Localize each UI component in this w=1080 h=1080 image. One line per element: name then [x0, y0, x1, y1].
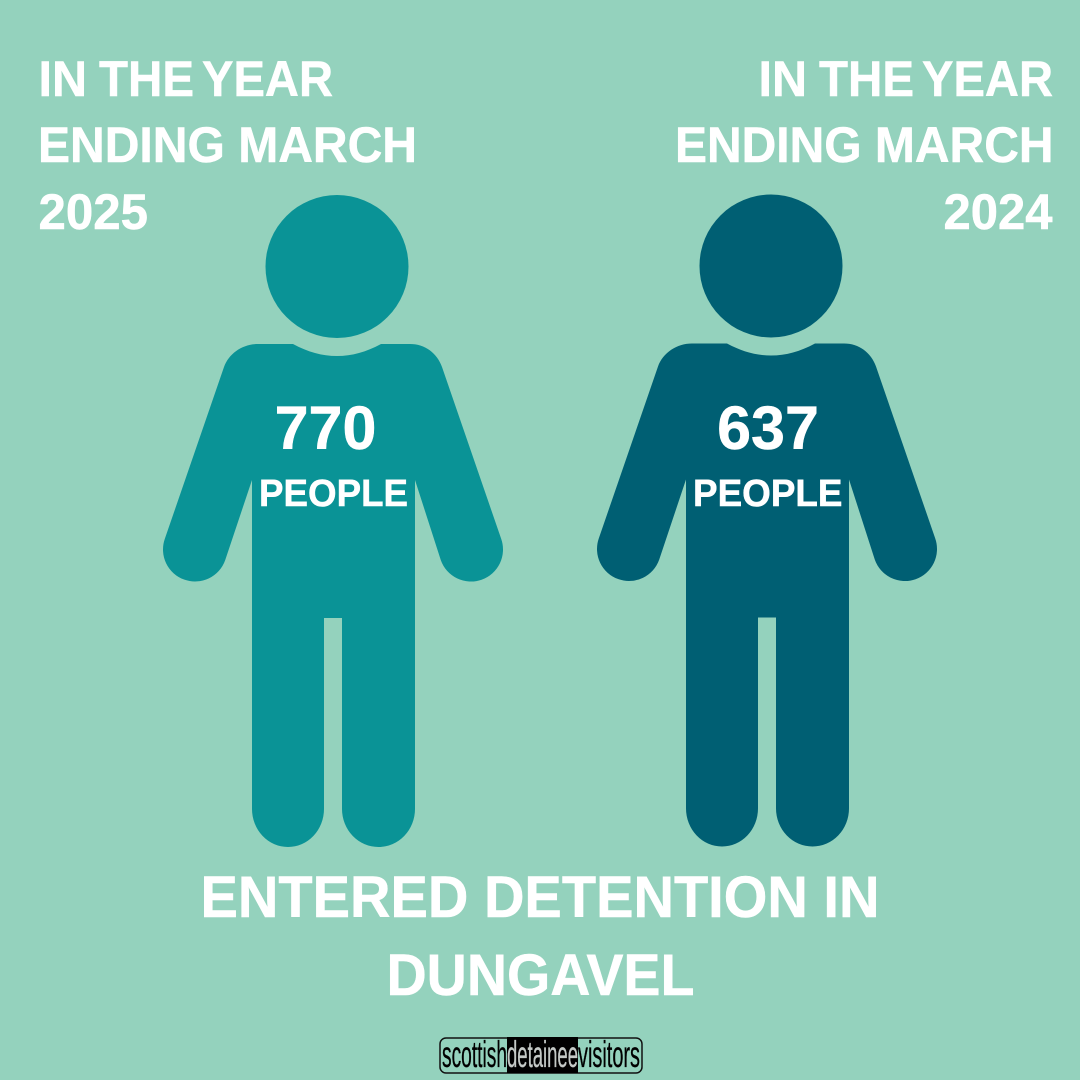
heading: year ending March 2024: 2024: [944, 184, 1053, 240]
number: 637: 637: [717, 394, 819, 462]
label: people: PEOPLE: [259, 473, 408, 515]
caption: entered detention in Dungavel: ENTERED DETENTION IN: [200, 865, 880, 930]
heading: year ending March 2025: THE: [99, 51, 194, 107]
heading: year ending March 2025: ENDING MARCH: [38, 117, 417, 173]
logo: scottish detainee visitors: scottish: [442, 1034, 507, 1075]
logo: scottish detainee visitors: visitors: [578, 1034, 640, 1075]
figure head 2024: [700, 194, 842, 338]
heading: year ending March 2024: ENDING MARCH: [675, 117, 1054, 173]
heading: year ending March 2024: THE: [819, 51, 914, 107]
heading: year ending March 2024: [675, 51, 1054, 240]
logo: scottish detainee visitors: [440, 1034, 642, 1075]
figure head 2025: [266, 195, 408, 338]
heading: year ending March 2025: 2025: [38, 184, 148, 240]
heading: year ending March 2025: YEAR: [202, 51, 333, 107]
figure body 2025: [163, 344, 503, 847]
icon: person figure 2024 with 637 people: [597, 194, 937, 846]
caption: entered detention in Dungavel: DUNGAVEL: [386, 943, 694, 1008]
icon: person figure 2025 with 770 people: [163, 195, 503, 847]
figure body 2024: [597, 344, 937, 846]
heading: year ending March 2024: YEAR: [922, 51, 1053, 107]
number: 770: 770: [275, 394, 376, 462]
logo: scottish detainee visitors: detainee: [507, 1034, 578, 1075]
heading: year ending March 2024: IN: [758, 51, 807, 107]
label: people: PEOPLE: [693, 473, 842, 515]
heading: year ending March 2025: IN: [38, 51, 87, 107]
caption: entered detention in Dungavel: [200, 865, 880, 1008]
heading: year ending March 2025: [38, 51, 417, 240]
